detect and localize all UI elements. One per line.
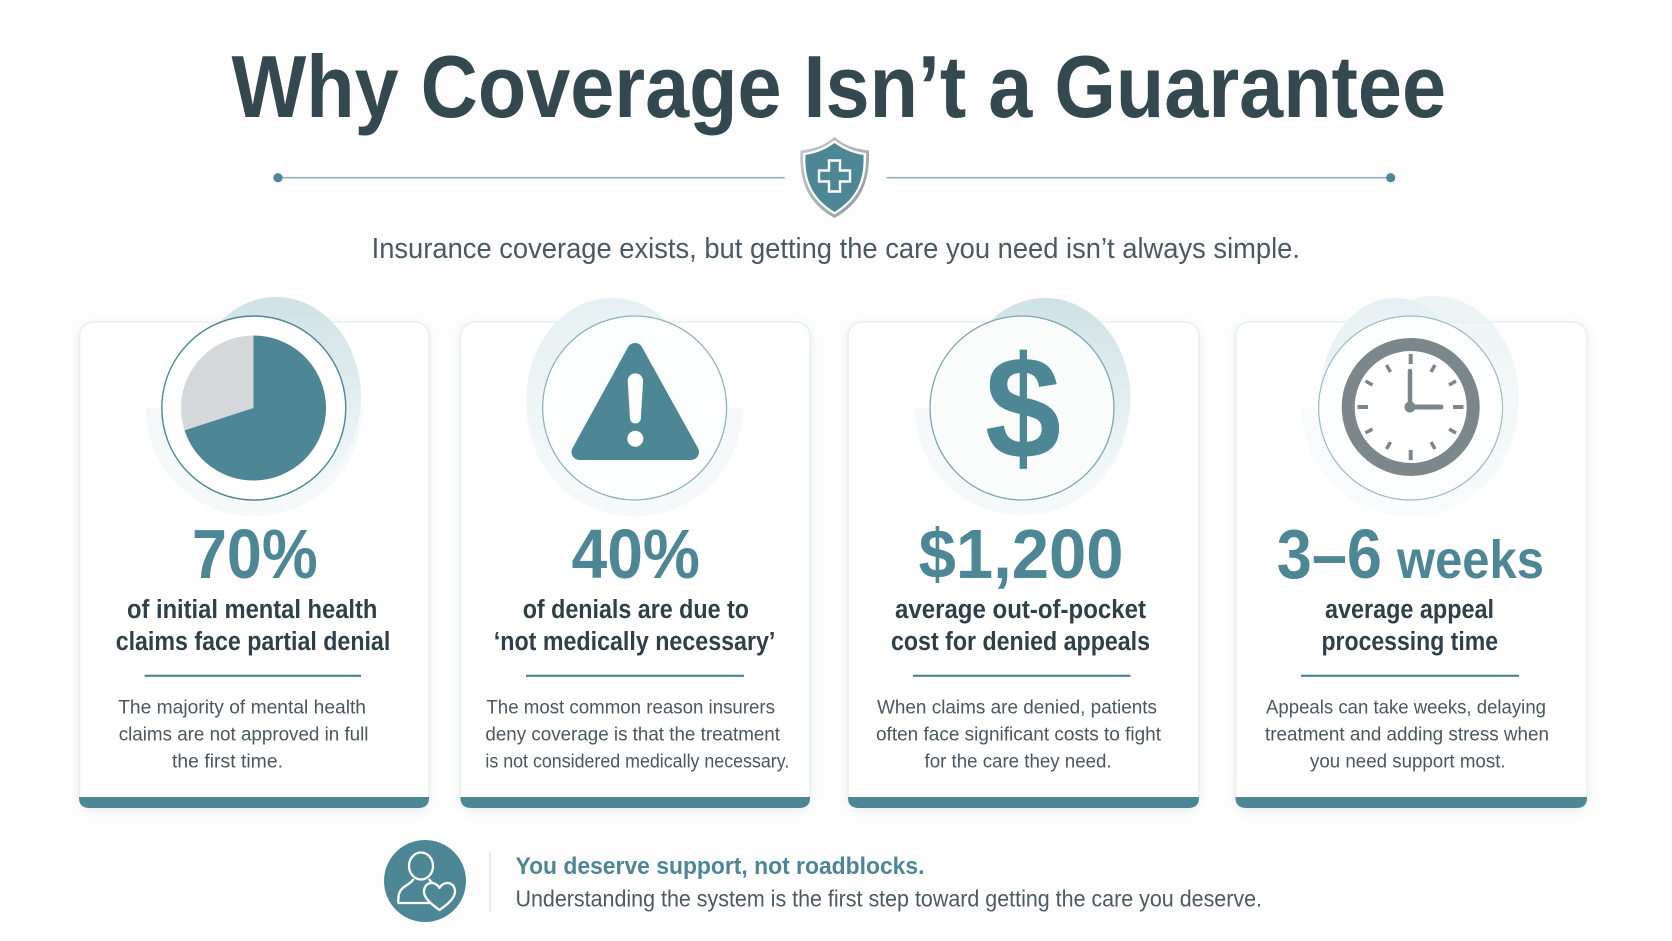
panel: $1,200 out-of-pocket: [848, 298, 1199, 808]
description: for the care they need.: [924, 750, 1112, 772]
statistic: $1,200: [919, 515, 1124, 593]
icon: clock in circle: [1302, 296, 1519, 516]
description: The most common reason insurers: [486, 696, 775, 718]
heading: average appeal: [1325, 596, 1494, 624]
description: deny coverage is that the treatment: [485, 724, 781, 746]
divider with shield emblem: [273, 137, 1395, 218]
description: often face significant costs to fight: [876, 724, 1162, 746]
footer callout: [384, 840, 1262, 922]
statistic: weeks: [1396, 530, 1544, 590]
description: treatment and adding stress when: [1265, 724, 1549, 746]
title: Why Coverage Isn’t a Guarantee: [232, 37, 1446, 136]
panel: 70% partial denial: [79, 297, 429, 808]
statistic: 3–6: [1277, 515, 1382, 593]
icon: warning triangle in circle: [526, 298, 743, 516]
description: the first time.: [172, 750, 283, 772]
icon: person with heart: [384, 840, 466, 922]
heading: processing time: [1322, 628, 1498, 656]
description: [876, 696, 1162, 772]
description: you need support most.: [1310, 750, 1506, 772]
description: [485, 696, 789, 772]
callout text: Understanding the system is the first step toward getting the care you deserve.: [516, 886, 1262, 912]
heading: of initial mental health: [127, 596, 377, 624]
statistic: 70%: [192, 515, 318, 593]
description: [1265, 696, 1549, 772]
panel: 3–6 weeks processing time: [1236, 296, 1587, 808]
icon: medical shield: [800, 137, 869, 218]
description: The majority of mental health: [118, 696, 366, 718]
heading: [116, 596, 390, 656]
description: When claims are denied, patients: [877, 696, 1157, 718]
heading: [494, 596, 775, 656]
heading: cost for denied appeals: [891, 628, 1150, 656]
description: claims are not approved in full: [119, 724, 368, 746]
icon: dollar sign in circle: [915, 298, 1130, 515]
heading: [1322, 596, 1498, 656]
heading: claims face partial denial: [116, 628, 390, 656]
description: [118, 696, 368, 772]
callout heading: You deserve support, not roadblocks.: [516, 853, 924, 880]
icon: pie chart in circle: [146, 297, 362, 516]
description: Appeals can take weeks, delaying: [1266, 696, 1546, 718]
subtitle: Insurance coverage exists, but getting the care you need isn’t always simple.: [372, 233, 1300, 265]
description: is not considered medically necessary.: [485, 750, 789, 772]
statistic: 40%: [572, 515, 700, 593]
statistic: [1277, 515, 1544, 593]
heading: ‘not medically necessary’: [494, 628, 775, 656]
panel: 40% not medically necessary: [460, 298, 810, 808]
heading: average out-of-pocket: [895, 596, 1146, 624]
icon: dollar sign in circle: $: [985, 326, 1061, 489]
heading: [891, 596, 1150, 656]
heading: of denials are due to: [523, 596, 749, 624]
